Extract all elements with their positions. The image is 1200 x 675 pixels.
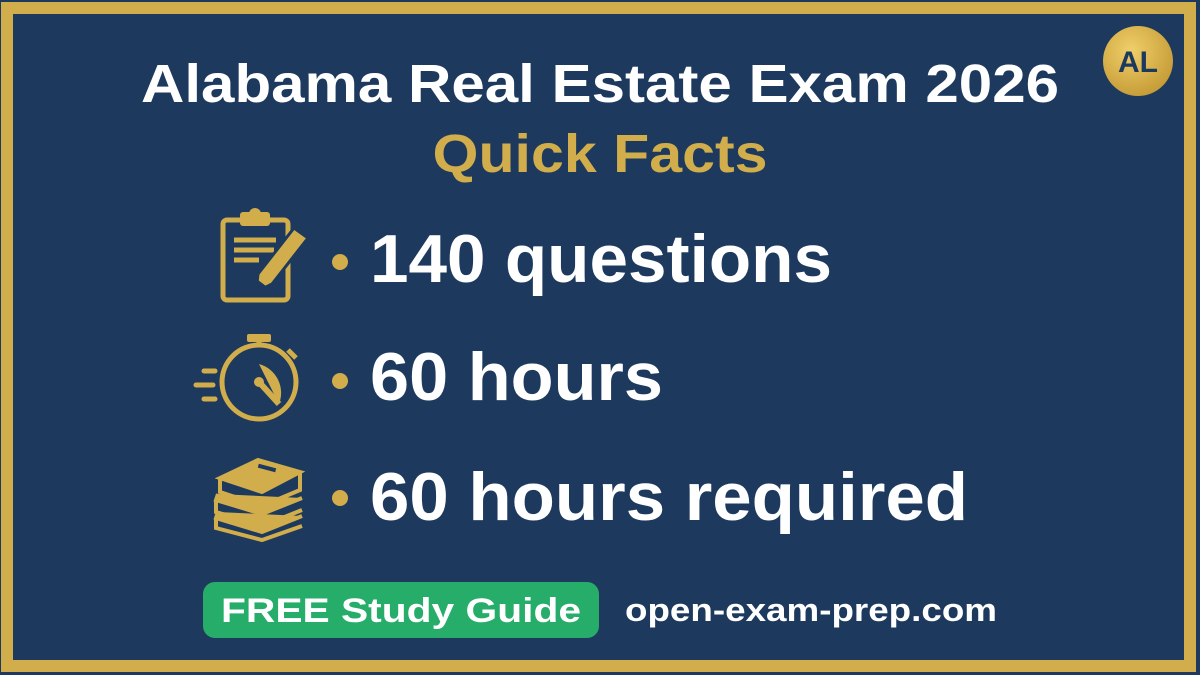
subtitle: Quick Facts [432, 124, 768, 184]
badge: AL: AL [1118, 46, 1158, 79]
badge: AL [1103, 26, 1173, 96]
bullet: 140 questions: 140 questions [370, 221, 832, 297]
icon: books [216, 460, 302, 540]
bullet: 60 hours: 60 hours [370, 339, 663, 415]
icon: stopwatch [196, 334, 296, 419]
website url: open-exam-prep.com [625, 592, 997, 628]
bullet: 60 hours required: 60 hours required [370, 459, 968, 535]
button: FREE Study Guide [203, 582, 599, 638]
icon: clipboard with pencil [223, 208, 308, 300]
button: FREE Study Guide: FREE Study Guide [221, 592, 581, 630]
title: Alabama Real Estate Exam 2026 [141, 54, 1059, 114]
